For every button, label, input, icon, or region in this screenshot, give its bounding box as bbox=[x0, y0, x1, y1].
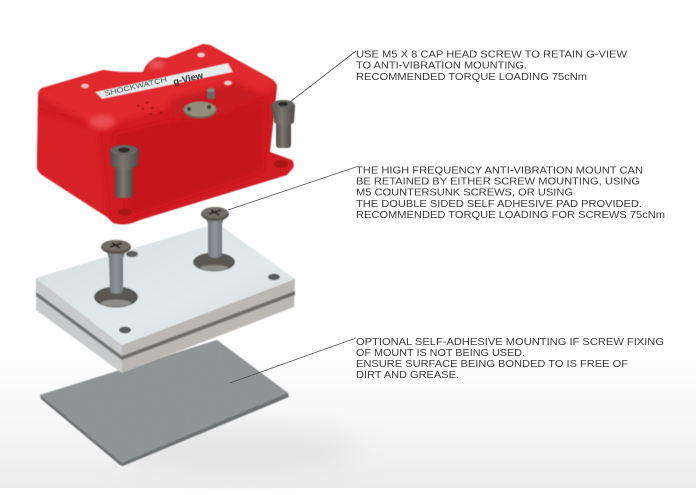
text block: adhesive pad instructions: OPTIONAL SELF-ADHESIVE MOUNTING IF SCREW FIXING bbox=[356, 337, 664, 348]
product label bbox=[95, 63, 233, 99]
housing base colour bbox=[30, 40, 300, 230]
housing bump highlight bbox=[148, 60, 164, 68]
cap head screw: rear bbox=[271, 100, 295, 148]
housing left face shading bbox=[36, 112, 106, 216]
red G-View sensor housing bbox=[30, 40, 300, 230]
countersunk screw: front bbox=[101, 240, 131, 294]
housing front shading bbox=[118, 104, 262, 210]
mounting plate bbox=[36, 223, 295, 373]
leader line: adhesive pad bbox=[230, 338, 356, 383]
rear flange hole bbox=[274, 160, 288, 168]
plate countersunk holes bbox=[94, 286, 138, 308]
status indicators on housing bbox=[81, 53, 232, 114]
text block: adhesive pad instructions: ENSURE SURFACE BEING BONDED TO IS FREE OF bbox=[356, 359, 628, 370]
text block: mount retention instructions: THE HIGH FREQUENCY ANTI-VIBRATION MOUNT CAN bbox=[356, 166, 643, 176]
text block: adhesive pad instructions bbox=[356, 337, 664, 381]
leader line: anti-vibration mount bbox=[228, 167, 356, 210]
text block: mount retention instructions: M5 COUNTERSUNK SCREWS, OR USING bbox=[356, 188, 573, 199]
connector disc and pin bbox=[183, 88, 217, 118]
text block: mount retention instructions: THE DOUBLE SIDED SELF ADHESIVE PAD PROVIDED. bbox=[356, 199, 642, 210]
front flange hole bbox=[118, 208, 132, 216]
product label: g-View bbox=[172, 70, 205, 88]
leader line: cap head screw bbox=[290, 51, 356, 102]
housing recess bbox=[170, 82, 262, 120]
text block: mount retention instructions: RECOMMENDED TORQUE LOADING FOR SCREWS 75cNm bbox=[356, 210, 665, 221]
plate side faces bbox=[36, 278, 122, 373]
text block: mount retention instructions: BE RETAINED BY EITHER SCREW MOUNTING, USING bbox=[356, 176, 640, 188]
text block: cap head screw instructions bbox=[356, 50, 627, 83]
text block: cap head screw instructions: RECOMMENDED TORQUE LOADING 75cNm bbox=[356, 72, 587, 83]
plate top face bbox=[36, 223, 295, 345]
text block: adhesive pad instructions: OF MOUNT IS NOT BEING USED. bbox=[356, 348, 525, 359]
text block: mount retention instructions bbox=[356, 166, 665, 221]
adhesive pad bbox=[40, 340, 289, 466]
text block: cap head screw instructions: TO ANTI-VIBRATION MOUNTING. bbox=[356, 61, 527, 72]
text block: adhesive pad instructions: DIRT AND GREASE. bbox=[356, 370, 459, 381]
countersunk screw: rear bbox=[201, 207, 229, 258]
cap head screw: front bbox=[110, 145, 139, 198]
product label: SHOCKWATCH bbox=[104, 77, 168, 98]
text block: cap head screw instructions: USE M5 X 8 CAP HEAD SCREW TO RETAIN G-VIEW bbox=[356, 50, 627, 60]
housing corner highlight bbox=[89, 115, 115, 129]
plate small holes bbox=[126, 251, 138, 257]
housing top face bbox=[38, 44, 276, 123]
